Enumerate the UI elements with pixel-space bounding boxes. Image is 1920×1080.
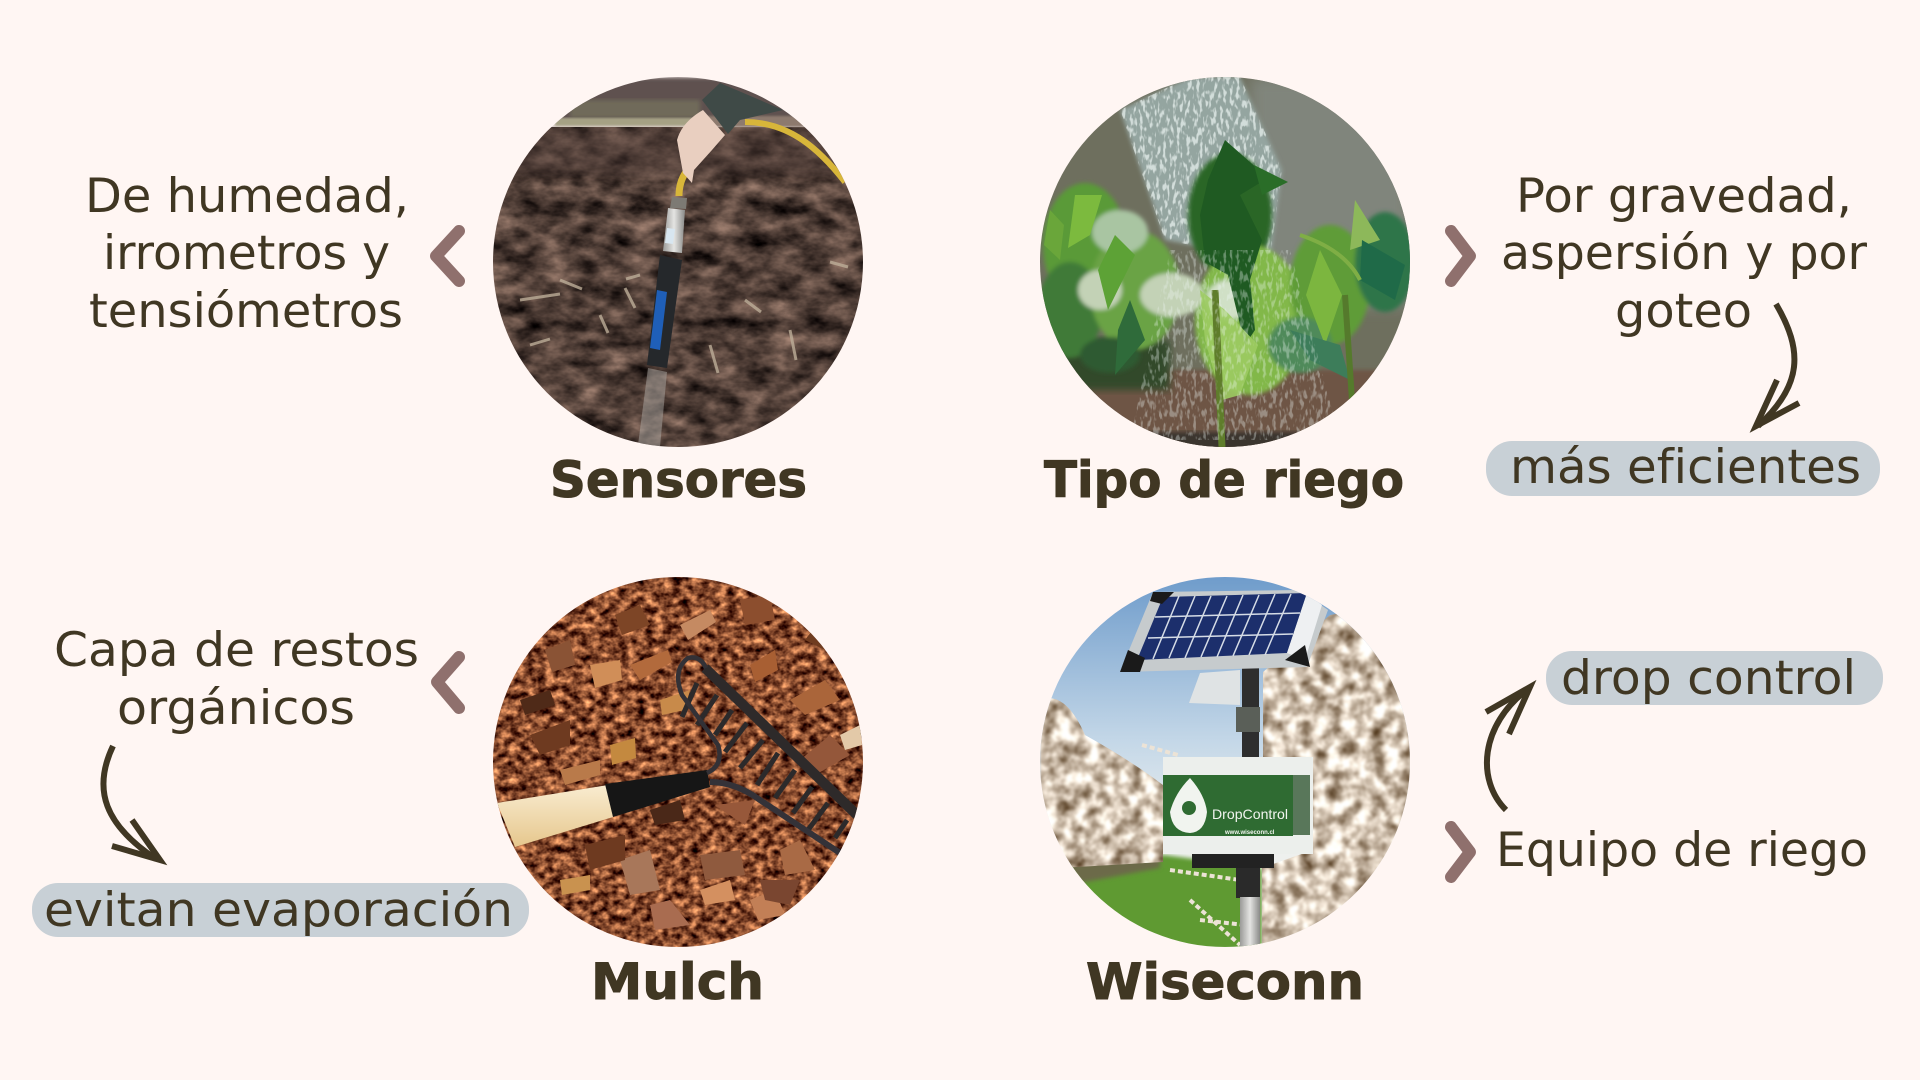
- text block: tipo de riego: goteo: [1615, 284, 1752, 339]
- text block: sensores: tensiómetros: [89, 284, 403, 339]
- photo: plant under water: [1038, 77, 1415, 452]
- chevron: sensores: [436, 231, 459, 281]
- arrow: equipo de riego to drop control: [1486, 687, 1530, 810]
- photo: sensor in soil: [493, 77, 870, 449]
- arrow: goteo to más eficientes: [1756, 304, 1799, 426]
- panel: tipo de riego: [1038, 77, 1880, 509]
- text block: mulch: orgánicos: [117, 681, 355, 736]
- text block: sensores: [85, 169, 409, 339]
- photo: drop control station: [1040, 577, 1420, 952]
- arrow: orgánicos to evitan evaporación: [103, 746, 160, 860]
- heading: wiseconn: Wiseconn: [1086, 953, 1364, 1011]
- chevron: mulch: [437, 657, 459, 708]
- text block: sensores: De humedad,: [85, 169, 409, 224]
- heading: sensores: Sensores: [550, 451, 807, 509]
- photo: rake on mulch: [493, 577, 863, 947]
- highlight pill: evitan evaporación: evitan evaporación: [44, 883, 513, 938]
- text block: mulch: [54, 623, 419, 736]
- highlight pill: drop control: drop control: [1561, 651, 1856, 706]
- panel: sensores: [85, 77, 870, 509]
- text block: tipo de riego: [1501, 169, 1868, 339]
- text block: sensores: irrometros y: [103, 226, 390, 281]
- panel: wiseconn: [1040, 577, 1883, 1011]
- highlight pill: más eficientes: más eficientes: [1510, 440, 1861, 495]
- panel: mulch: [32, 577, 863, 1011]
- text block: wiseconn: Equipo de riego: [1496, 823, 1868, 878]
- chevron: tipo de riego: [1451, 231, 1470, 281]
- photo: drop control station: DropControl: [1212, 806, 1288, 822]
- text block: tipo de riego: Por gravedad,: [1516, 169, 1852, 224]
- text block: mulch: Capa de restos: [54, 623, 419, 678]
- heading: tipo de riego: Tipo de riego: [1044, 451, 1404, 509]
- photo: drop control station: www.wiseconn.cl: [1224, 830, 1275, 836]
- text block: tipo de riego: aspersión y por: [1501, 226, 1868, 281]
- chevron: wiseconn: [1451, 827, 1470, 877]
- heading: mulch: Mulch: [591, 953, 764, 1011]
